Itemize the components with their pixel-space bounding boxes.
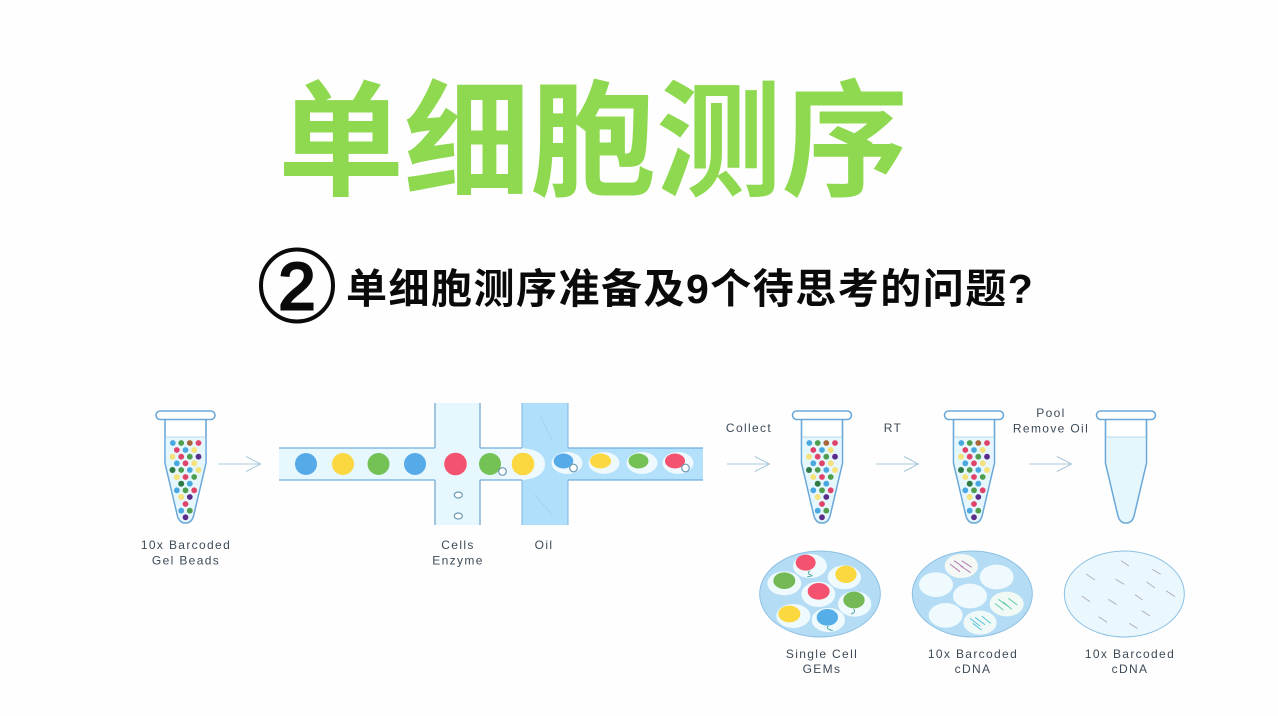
label: cells enzyme: Enzyme (432, 553, 484, 567)
label: pool remove oil: Remove Oil (1013, 421, 1089, 435)
circle: single cell GEMs (760, 551, 880, 637)
label: barcoded cDNA middle: 10x Barcoded (928, 647, 1018, 661)
tube: after RT (944, 411, 1004, 523)
oil channel (522, 403, 568, 525)
label: pool remove oil: Pool (1036, 406, 1066, 420)
label: RT: RT (884, 421, 902, 435)
label: single cell GEMs: GEMs (803, 662, 841, 676)
label: cells enzyme: Cells (441, 538, 475, 552)
label: oil: Oil (535, 538, 553, 552)
main channel (279, 448, 703, 480)
tube: collected GEMs (792, 411, 852, 523)
label: barcoded cDNA right: 10x Barcoded (1085, 647, 1175, 661)
arrow: collect (727, 456, 770, 472)
cells channel (435, 403, 480, 525)
cells and beads in channel (295, 453, 534, 519)
label: single cell GEMs: Single Cell (786, 647, 858, 661)
microfluidic chip (279, 403, 703, 525)
arrow: RT (876, 456, 918, 472)
tube: pooled (1096, 411, 1156, 523)
subtitle number badge (261, 249, 333, 323)
label: gel beads: 10x Barcoded (141, 538, 231, 552)
tube: gel beads (156, 411, 215, 523)
label: collect: Collect (726, 421, 772, 435)
circle: pooled cDNA (1064, 551, 1184, 637)
subtitle number badge: 2 (279, 249, 315, 323)
label: barcoded cDNA middle: cDNA (955, 662, 991, 676)
subtitle: 单细胞测序准备及9个待思考的问题? (346, 266, 1034, 312)
arrow: beads to chip (218, 456, 260, 472)
label: barcoded cDNA right: cDNA (1112, 662, 1148, 676)
title: 单细胞测序 (278, 72, 908, 213)
circle: barcoded cDNA droplets (912, 551, 1032, 637)
label: gel beads: Gel Beads (152, 553, 220, 567)
droplets in oil (552, 452, 694, 474)
arrow: pool (1029, 456, 1072, 472)
